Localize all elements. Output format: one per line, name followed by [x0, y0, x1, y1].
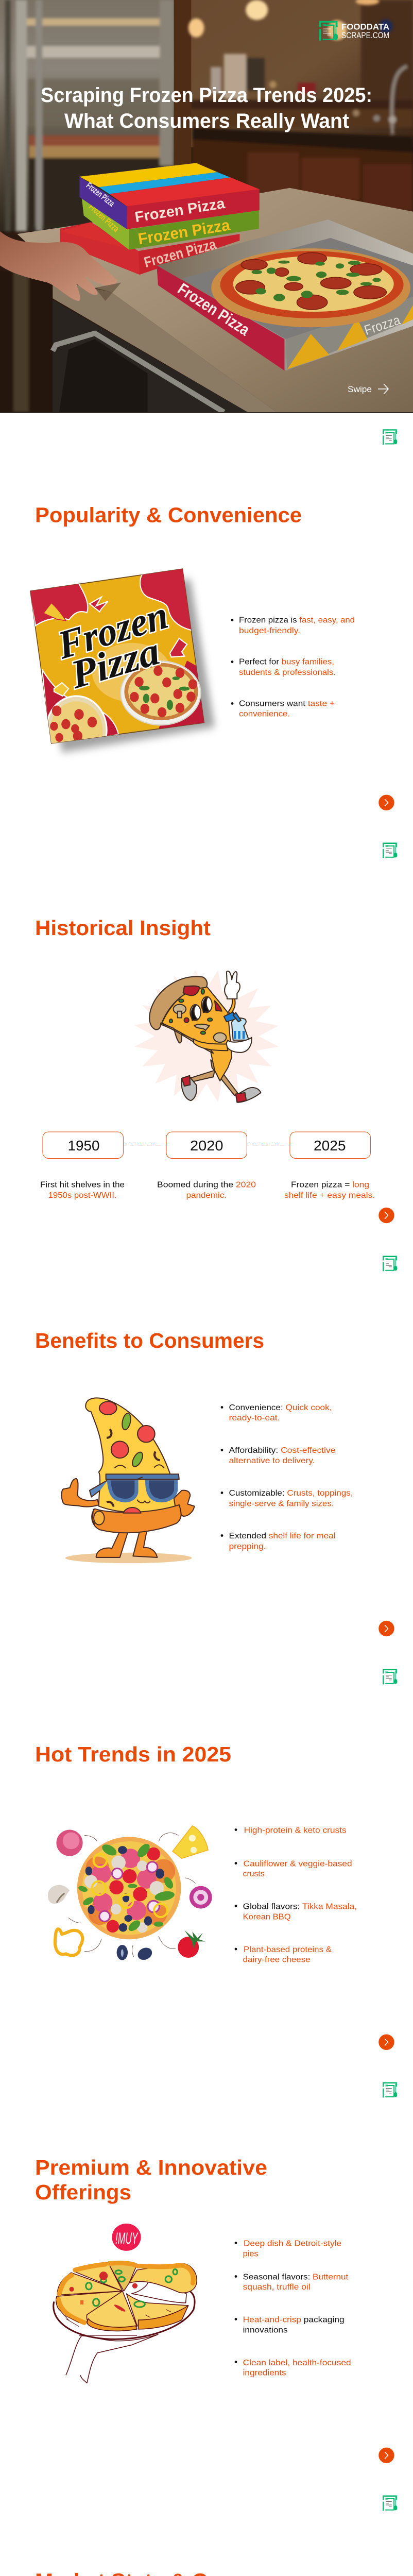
stacked pizza boxes	[60, 222, 239, 275]
bullet: convenience: Convenience: Quick cook,	[229, 1403, 332, 1412]
bullet: clean label: ingredients	[243, 2369, 286, 2378]
text: 2020 note: Boomed during the 2020	[157, 1181, 256, 1190]
arrow: next	[378, 1621, 394, 1636]
icon: brand mark	[383, 843, 397, 858]
bullet: high protein: High-protein & keto crusts	[244, 1826, 347, 1835]
bullet: fast and easy: Frozen pizza is fast, easy, and	[239, 616, 355, 625]
photo scene illustration: Frozen Pizza	[87, 201, 121, 234]
illustration: running pizza slice mascot	[134, 970, 279, 1103]
stone counter	[17, 188, 413, 412]
illustration: hand-drawn pizza on a tray	[54, 2224, 197, 2383]
photo scene illustration: Frozen Pizza	[175, 279, 253, 340]
icon: brand mark	[383, 430, 397, 444]
title	[41, 84, 372, 132]
open pizza tray	[157, 219, 413, 370]
bullet: plant based: dairy-free cheese	[243, 1956, 311, 1964]
bullet: shelf life	[221, 1532, 336, 1551]
timeline: 2025: 2025	[314, 1138, 346, 1154]
title: Scraping Frozen Pizza Trends 2025:	[41, 84, 372, 107]
bullet: affordability	[221, 1446, 336, 1465]
bullet: fast and easy	[231, 616, 355, 635]
bullet: convenience: ready-to-eat.	[229, 1414, 280, 1422]
illustration: frozen pizza box: Frozen	[53, 592, 172, 668]
photo scene illustration: Frozen Pizza	[134, 195, 227, 226]
bullet: seasonal flavors: Seasonal flavors: Butternut	[243, 2273, 349, 2281]
panel: popularity and convenience	[30, 429, 398, 810]
hand	[0, 231, 117, 301]
bullet: customizable	[221, 1489, 353, 1509]
bullet: cauliflower	[235, 1859, 352, 1878]
arrow: next	[378, 1208, 394, 1223]
pendant lights	[188, 0, 393, 40]
icon: brand mark	[383, 2083, 397, 2097]
text: 2020 note	[157, 1181, 256, 1200]
bullet: deep dish: Deep dish & Detroit-style	[244, 2240, 341, 2248]
panel: premium and innovative offerings	[35, 2082, 398, 2463]
bullet: cauliflower: Cauliflower & veggie-based	[244, 1859, 352, 1868]
panel: hot trends in 2025	[35, 1669, 398, 2050]
photo scene illustration: Frozen Pizza	[142, 236, 218, 271]
illustration: frozen pizza box	[29, 567, 215, 764]
heading: Hot Trends in 2025	[35, 1742, 231, 1766]
photo scene illustration	[0, 0, 413, 412]
bullet: taste and convenience	[231, 700, 335, 719]
logo: FoodData Scrape	[320, 22, 389, 40]
timeline: 1950	[43, 1132, 123, 1158]
text: 2025 note: Frozen pizza = long	[291, 1181, 369, 1190]
oven door	[53, 300, 248, 412]
bullet: busy families: Perfect for busy families,	[239, 658, 334, 667]
bullet: affordability: Affordability: Cost-effective	[229, 1446, 336, 1455]
photo scene illustration: Frozza	[363, 312, 402, 338]
text: 1950 note: First hit shelves in the	[40, 1181, 125, 1190]
bullet: global flavors: Korean BBQ	[243, 1912, 291, 1922]
timeline: 1950: 1950	[68, 1138, 100, 1154]
heading	[35, 2156, 267, 2204]
panel: market stats and consumer insights	[35, 2496, 398, 2576]
icon: brand mark	[383, 2496, 397, 2511]
heading: Historical Insight	[35, 916, 211, 940]
panel: historical insight	[35, 843, 398, 1223]
bullet: plant based: Plant-based proteins &	[244, 1945, 332, 1954]
logo: FoodData Scrape: FOODDATA	[341, 22, 389, 32]
bullet: seasonal flavors: squash, truffle oil	[243, 2283, 311, 2292]
bullet: cauliflower: crusts	[243, 1870, 265, 1878]
heading: Popularity & Convenience	[35, 503, 302, 527]
bullet: clean label: Clean label, health-focused	[243, 2359, 351, 2367]
photo scene illustration: Frozen Pizza	[84, 180, 117, 209]
bullet: affordability: alternative to delivery.	[229, 1456, 315, 1465]
text: 2025 note: shelf life + easy meals.	[284, 1191, 375, 1200]
panel: benefits to consumers	[35, 1256, 398, 1636]
text: 2025 note	[284, 1181, 375, 1200]
timeline: 2020	[166, 1132, 247, 1158]
arrow: next	[378, 795, 394, 810]
timeline: 2025	[290, 1132, 370, 1158]
text: 1950 note: 1950s post-WWII.	[48, 1191, 117, 1200]
illustration: watercolour pizza and toppings	[48, 1826, 212, 1962]
icon: brand mark	[383, 1257, 397, 1271]
icon: brand mark	[383, 1670, 397, 1684]
heading: Premium & Innovative	[35, 2156, 267, 2179]
illustration: pizza slice with sunglasses	[62, 1398, 194, 1563]
bullet: global flavors	[235, 1903, 357, 1922]
heading: Offerings	[35, 2180, 131, 2204]
bullet: taste and convenience: convenience.	[239, 710, 290, 719]
bullet: fast and easy: budget-friendly.	[239, 626, 300, 635]
title: What Consumers Really Want	[64, 110, 349, 132]
bullet: taste and convenience: Consumers want taste +	[239, 700, 335, 708]
illustration: hand-drawn pizza on a tray: !MUY	[115, 2229, 139, 2247]
bullet: packaging: innovations	[243, 2326, 288, 2335]
bullet: plant based	[235, 1945, 332, 1964]
bullet: packaging	[235, 2316, 345, 2335]
bullet: customizable: single-serve & family sizes.	[229, 1499, 334, 1509]
bullet: busy families	[231, 658, 336, 677]
bullet: seasonal flavors	[235, 2273, 349, 2292]
swipe prompt with arrow: Swipe	[348, 384, 372, 394]
heading: Benefits to Consumers	[35, 1329, 264, 1352]
swipe prompt with arrow	[348, 384, 388, 394]
illustration: frozen pizza box: Pizza	[66, 629, 164, 697]
bullet: convenience	[221, 1403, 332, 1422]
timeline: 2020: 2020	[190, 1138, 223, 1154]
text: 1950 note	[40, 1181, 125, 1200]
bullet: deep dish	[235, 2240, 341, 2259]
bullet: deep dish: pies	[243, 2250, 259, 2259]
bullet: clean label	[235, 2359, 351, 2378]
timeline connector	[124, 1145, 290, 1146]
photo scene illustration: Frozen Pizza	[137, 216, 232, 248]
text: 2020 note: pandemic.	[186, 1191, 227, 1200]
logo: FoodData Scrape: SCRAPE.COM	[341, 30, 389, 40]
bullet: busy families: students & professionals.	[239, 668, 336, 677]
bullet: shelf life: Extended shelf life for meal	[229, 1532, 336, 1540]
arrow: next	[378, 2035, 394, 2050]
bullet: shelf life: prepping.	[229, 1543, 266, 1551]
bullet: customizable: Customizable: Crusts, toppings,	[229, 1489, 353, 1498]
bullet: global flavors: Global flavors: Tikka Masala,	[243, 1903, 357, 1911]
bullet: packaging: Heat-and-crisp packaging	[243, 2316, 345, 2325]
arrow: next	[378, 2448, 394, 2463]
pizza	[211, 248, 410, 327]
